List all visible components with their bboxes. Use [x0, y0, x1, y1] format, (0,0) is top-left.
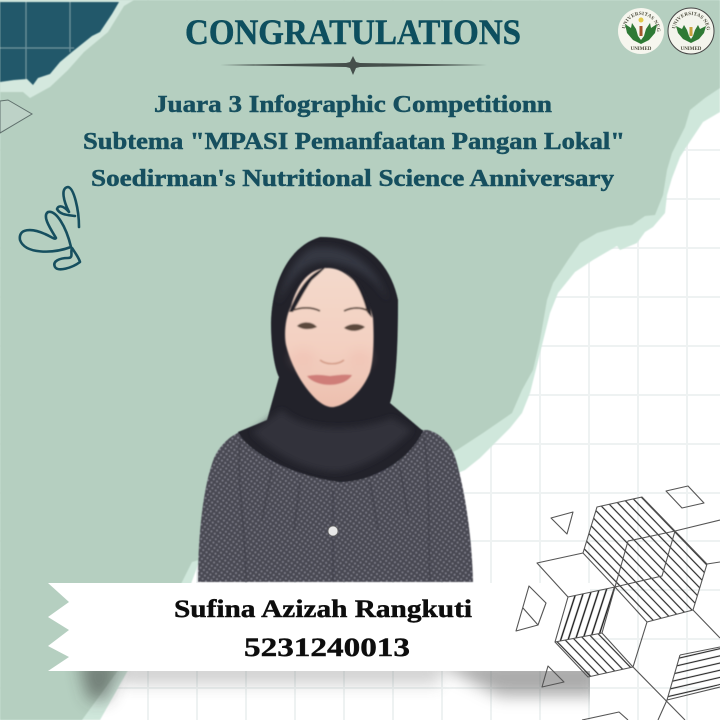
- shirt button: [328, 526, 338, 536]
- student id: 5231240013: [244, 633, 410, 662]
- logo: faculty: UNIMED: [681, 47, 702, 52]
- icon: university logos: [618, 8, 714, 54]
- divider ornament: [220, 56, 487, 75]
- eyes: [297, 322, 365, 331]
- shirt: [198, 430, 473, 582]
- cheeks: [291, 349, 315, 367]
- text block: competition details: Juara 3 Infographic Competitionn: [154, 92, 552, 118]
- panel: top-left teal corner with grid: [0, 2, 119, 85]
- mouth: [307, 375, 352, 385]
- panel: top-left pale torn corner: [0, 0, 134, 98]
- banner: name ribbon: [48, 583, 590, 671]
- icon: hearts doodle: [20, 187, 80, 269]
- name: Sufina Azizah Rangkuti: [174, 596, 472, 623]
- photo: student portrait: [198, 237, 473, 582]
- logo: faculty: [668, 8, 714, 54]
- banner shadow: [78, 660, 600, 700]
- geometric decoration: [516, 486, 720, 720]
- hair fringe: [289, 267, 326, 312]
- title: CONGRATULATIONS: [185, 12, 521, 52]
- text block: competition details: Soedirman's Nutritional Science Anniversary: [91, 166, 614, 192]
- logo: university: [618, 8, 664, 54]
- text block: competition details: [83, 92, 625, 192]
- hijab: [238, 237, 423, 482]
- icon: triangle outline: [0, 100, 32, 133]
- eyebrows: [294, 308, 368, 311]
- text block: competition details: Subtema "MPASI Pemanfaatan Pangan Lokal": [83, 129, 625, 155]
- face: [285, 267, 374, 407]
- nose: [320, 360, 344, 364]
- logo: university: UNIMED: [631, 47, 652, 52]
